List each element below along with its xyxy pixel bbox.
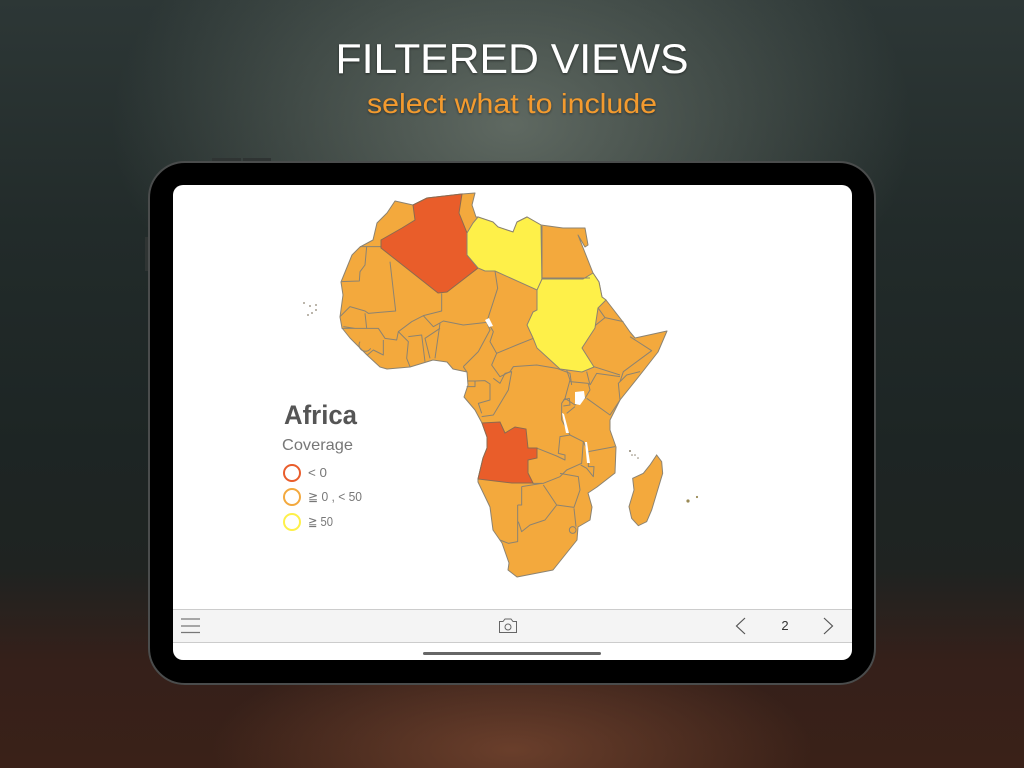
tablet device — [145, 158, 875, 684]
small islands — [303, 302, 698, 503]
Angola — [478, 422, 537, 483]
title: FILTERED VIEWS — [336, 35, 688, 82]
tablet bezel — [149, 162, 875, 684]
map of Africa — [303, 193, 698, 577]
subtitle: select what to include — [367, 88, 657, 119]
toolbar background — [173, 610, 852, 642]
page number: 2 — [781, 618, 789, 633]
Sudan — [527, 273, 606, 372]
Madagascar — [629, 455, 663, 526]
central and southern country borders — [467, 370, 640, 543]
screen — [173, 185, 852, 660]
continent base — [340, 193, 667, 577]
Algeria — [381, 194, 478, 293]
legend item: 50 and above: ≧ 50 — [308, 514, 333, 529]
northern and western country borders — [340, 247, 652, 385]
Libya — [467, 217, 542, 290]
hardware buttons — [145, 158, 271, 271]
legend subtitle: Coverage — [282, 437, 353, 454]
icon: previous arrow — [736, 618, 745, 634]
icon: next arrow — [824, 618, 832, 634]
toolbar — [173, 610, 852, 642]
legend — [282, 400, 362, 530]
icon: camera — [500, 619, 516, 632]
toolbar rules — [173, 610, 852, 642]
lakes — [485, 318, 590, 463]
icon: menu — [181, 619, 200, 632]
legend title: Africa — [284, 400, 358, 430]
legend item: 0 to 50: ≧ 0 , < 50 — [308, 489, 362, 504]
home indicator — [423, 652, 601, 655]
Egypt border — [542, 226, 590, 278]
legend item: below 0: < 0 — [308, 465, 327, 480]
